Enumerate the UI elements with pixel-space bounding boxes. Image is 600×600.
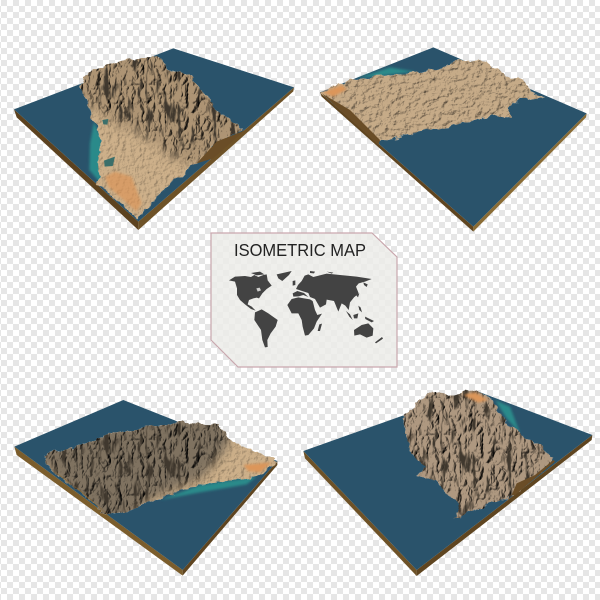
left side of block (320, 92, 473, 232)
sea surface (14, 48, 294, 222)
mountain range (79, 56, 244, 168)
sea surface (303, 391, 592, 570)
americas (229, 271, 292, 347)
isometric terrain block: top right (320, 47, 587, 232)
shallow teal coast (160, 477, 257, 500)
orange desert (323, 85, 347, 97)
africa, eurasia, australia (287, 271, 383, 343)
lagoons (102, 119, 115, 167)
shallow teal coast (357, 67, 415, 78)
sea surface (14, 400, 277, 570)
land mass (320, 58, 543, 142)
card frame (211, 233, 397, 367)
coastal plain (43, 423, 277, 515)
left side of block (303, 451, 417, 576)
exposed terrain cross-section (197, 130, 245, 163)
isometric terrain block: bottom left (14, 400, 277, 576)
orange desert (105, 172, 142, 212)
card title: ISOMETRIC MAP (234, 240, 366, 260)
isometric terrain block: top left (14, 48, 294, 230)
land mass (402, 389, 553, 518)
right side of block (183, 461, 277, 576)
world map (229, 271, 383, 347)
right side of block (473, 113, 587, 232)
exposed terrain cross-section (322, 93, 380, 145)
left side of block (14, 447, 183, 576)
right side of block (138, 87, 294, 230)
exposed terrain cross-section (50, 468, 110, 517)
orange desert (463, 392, 488, 403)
shallow teal coast (89, 122, 102, 183)
info card: isometric map (211, 233, 397, 367)
isometric terrain block: bottom right (303, 389, 592, 576)
exposed terrain cross-section (512, 460, 555, 495)
orange desert (243, 462, 272, 472)
coastal plain (80, 56, 243, 219)
left side of block (14, 109, 138, 230)
sea surface (320, 47, 587, 227)
right side of block (417, 435, 592, 576)
shallow teal coast (495, 400, 520, 433)
dark mountain range (44, 420, 234, 514)
